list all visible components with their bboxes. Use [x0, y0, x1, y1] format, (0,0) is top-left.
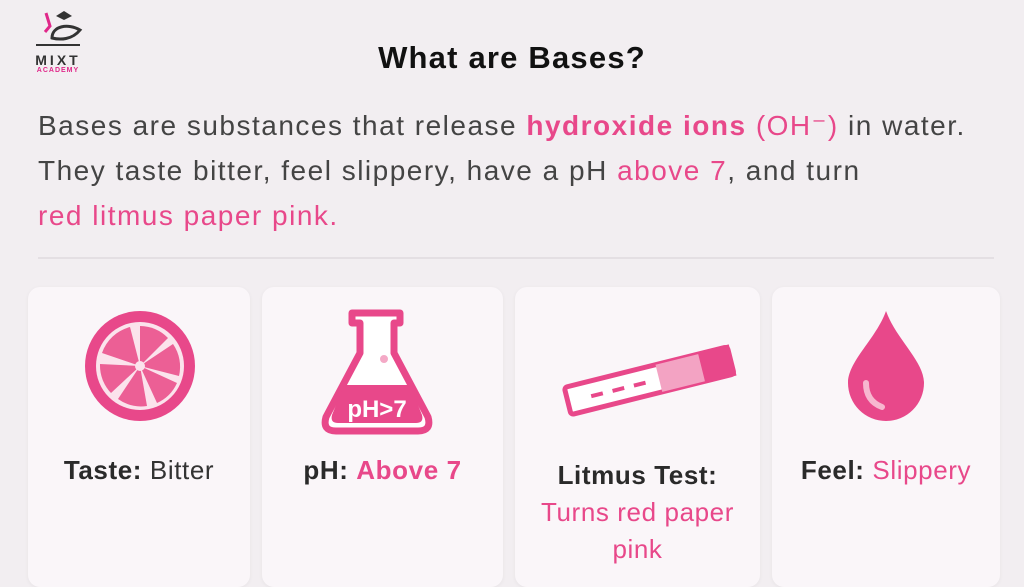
card: taste — [28, 287, 250, 587]
label: Taste: Bitter — [64, 455, 214, 485]
text: ACADEMY — [37, 67, 79, 74]
label: Feel: Slippery — [801, 455, 971, 485]
title: What are Bases? — [378, 40, 646, 75]
icon: drop — [848, 311, 924, 421]
logo: MIXT — [35, 52, 81, 68]
card: litmus — [515, 287, 760, 587]
label: Turns red paper — [541, 497, 734, 527]
card: feel — [772, 287, 1000, 587]
description: red litmus paper pink. — [38, 200, 339, 231]
icon: flask — [322, 310, 432, 434]
icon: litmus strip — [562, 344, 736, 416]
label — [541, 460, 734, 564]
icon: flask: pH>7 — [347, 396, 407, 423]
description — [38, 110, 966, 231]
label: Litmus Test: — [558, 460, 717, 490]
label: pH: Above 7 — [303, 455, 462, 485]
description: Bases are substances that release hydroxide ions (OH⁻) in water. — [38, 110, 966, 141]
card: pH — [262, 287, 503, 587]
description: They taste bitter, feel slippery, have a pH above 7, and turn — [38, 155, 861, 186]
icon: grapefruit — [85, 311, 195, 421]
label: pink — [612, 534, 663, 564]
logo — [35, 11, 82, 74]
